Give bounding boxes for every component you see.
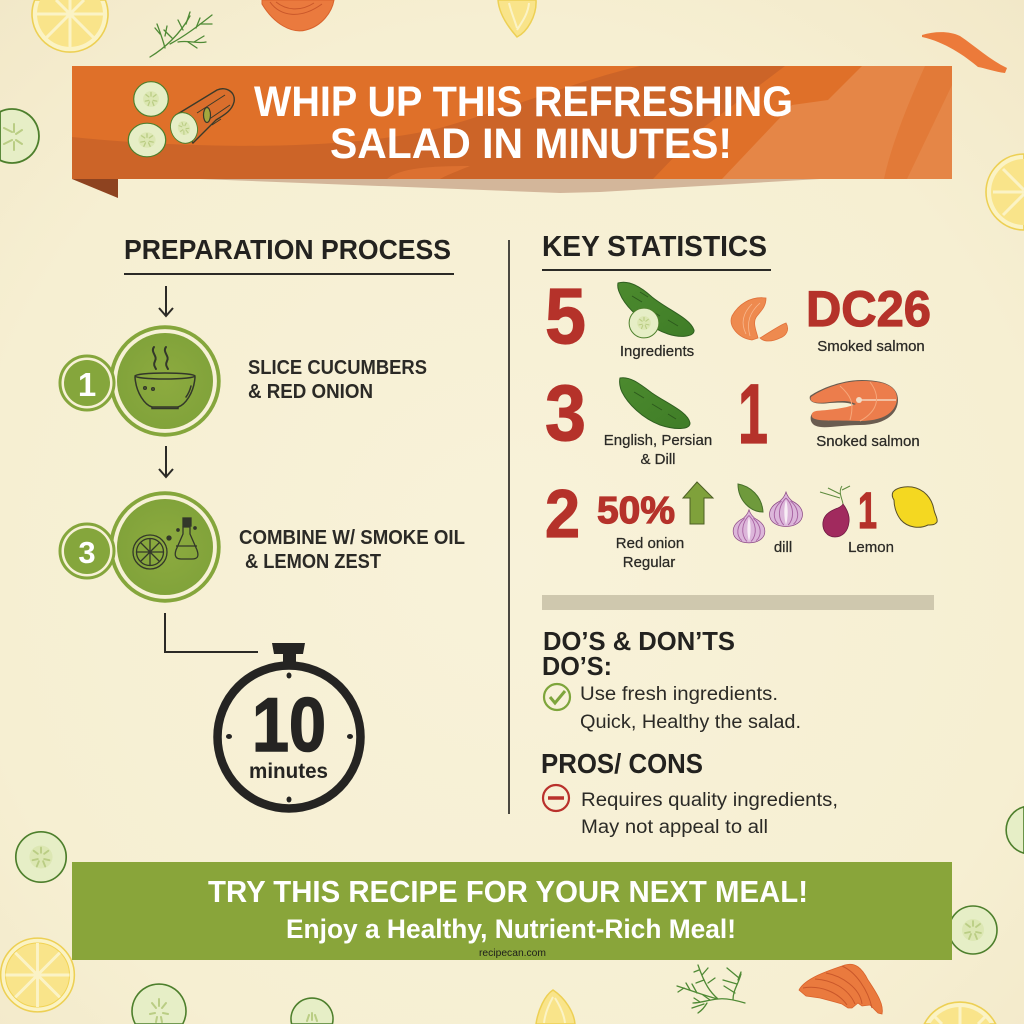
step 1 number badge: 1 xyxy=(78,366,96,403)
stat: DC26 smoked salmon xyxy=(731,281,931,355)
footer banner xyxy=(72,862,952,960)
icon: salmon piece top xyxy=(262,0,334,31)
heading: KEY STATISTICS xyxy=(542,231,767,263)
cucumber body xyxy=(176,89,234,143)
icon: lemon wedge top xyxy=(498,0,536,37)
stat: 2 red onion: Red onion xyxy=(616,535,684,552)
icon: cucumber slice lower right edge xyxy=(1006,807,1024,853)
footer headline: TRY THIS RECIPE FOR YOUR NEXT MEAL! xyxy=(208,874,808,909)
icon: salmon steak xyxy=(810,380,898,427)
title banner xyxy=(72,66,952,198)
icon: dill on red onion xyxy=(820,486,850,537)
panel: preparation process xyxy=(60,234,465,808)
icon: lemon slice right xyxy=(986,154,1024,230)
stat: 1 lemon: 1 xyxy=(858,482,877,539)
banner lighter area xyxy=(722,66,952,179)
icon: basil leaf xyxy=(738,484,763,512)
icon: salmon pieces xyxy=(731,298,788,341)
icon: dill sprig bottom xyxy=(677,965,745,1013)
do's text: Use fresh ingredients. xyxy=(580,684,778,705)
icon: cucumber xyxy=(620,378,690,429)
stat: 2 red onion: 2 xyxy=(545,476,580,552)
stat: DC26 smoked salmon: DC26 xyxy=(806,281,931,337)
cons text: Requires quality ingredients, xyxy=(581,790,838,811)
icon: lemon xyxy=(892,487,937,527)
icon: lemon slice bottom left xyxy=(1,938,74,1012)
step 3 text: COMBINE W/ SMOKE OIL xyxy=(239,527,465,549)
stat: 3 varieties: & Dill xyxy=(640,451,676,468)
banner shadow xyxy=(200,179,820,193)
source credit: recipecan.com xyxy=(479,948,546,959)
banner fold xyxy=(72,179,118,198)
stat: 3 varieties: English, Persian xyxy=(604,432,712,449)
step 3 xyxy=(60,493,219,601)
do's text: Quick, Healthy the salad. xyxy=(580,712,801,733)
panel: do's and don'ts xyxy=(541,626,838,838)
sub-heading: DO’S: xyxy=(542,651,612,681)
centre divider xyxy=(508,240,510,814)
icon: lemon slice top left xyxy=(32,0,108,52)
step 1 circle xyxy=(111,327,219,435)
step 3 number badge: 3 xyxy=(78,535,96,570)
stat: 1 snoked salmon: 1 xyxy=(738,367,768,461)
icon: cucumber slice lower left xyxy=(16,832,66,882)
arrow into step 1 xyxy=(159,286,173,316)
stat: 3 varieties xyxy=(545,368,712,468)
step 3 text: & LEMON ZEST xyxy=(245,551,381,573)
icon: onion left xyxy=(733,510,765,543)
title line 2: SALAD IN MINUTES! xyxy=(330,120,732,168)
cons text: May not appeal to all xyxy=(581,817,768,838)
panel: key statistics xyxy=(542,231,937,571)
banner darker wave xyxy=(72,66,785,179)
icon: lemon and oil bottle xyxy=(133,518,198,569)
icon: cucumber slice bottom xyxy=(132,984,186,1024)
banner diagonal band xyxy=(884,66,952,179)
stat: dill and onions xyxy=(733,484,802,556)
icon: onion right xyxy=(770,492,802,526)
stat: DC26 smoked salmon: Smoked salmon xyxy=(817,338,925,355)
heading: PROS/ CONS xyxy=(541,748,703,779)
icon: lemon slice bottom right xyxy=(924,1002,996,1024)
stat: 5 ingredients: 5 xyxy=(545,271,586,360)
step 3 circle xyxy=(111,493,219,601)
banner body xyxy=(72,66,952,179)
footer sub-headline: Enjoy a Healthy, Nutrient-Rich Meal! xyxy=(286,914,736,944)
section divider bar xyxy=(542,595,934,610)
icon: cucumber slice left xyxy=(0,109,39,163)
stat: 1 snoked salmon: Snoked salmon xyxy=(816,433,920,450)
banner small light patch xyxy=(387,166,470,179)
heading rule xyxy=(542,269,771,271)
stat: 1 lemon xyxy=(820,482,937,556)
connector to timer xyxy=(165,613,258,652)
heading rule xyxy=(124,273,454,275)
icon: lemon wedge bottom xyxy=(536,990,575,1024)
timer value: 10 xyxy=(252,683,326,768)
step 1 xyxy=(60,327,219,435)
icon: up arrow xyxy=(683,482,713,524)
timer unit: minutes xyxy=(249,760,328,783)
icon: cucumber slice by footer xyxy=(949,906,997,954)
footer background xyxy=(72,862,952,960)
title line 1: WHIP UP THIS REFRESHING xyxy=(254,78,793,126)
stat: 2 red onion: Regular xyxy=(623,554,675,571)
banner icon: cucumber xyxy=(128,82,234,157)
stat: 1 lemon: Lemon xyxy=(848,539,894,556)
stat: dill and onions: dill xyxy=(774,539,792,556)
stat: 5 ingredients: Ingredients xyxy=(620,343,694,360)
stat: 1 snoked salmon xyxy=(738,367,920,461)
stat: 2 red onion: 50% xyxy=(597,490,675,532)
step 1 text: SLICE CUCUMBERS xyxy=(248,357,427,379)
icon: salmon piece bottom xyxy=(799,964,882,1014)
heading: PREPARATION PROCESS xyxy=(124,234,451,265)
icon: check xyxy=(544,684,570,710)
icon: cucumber with slice xyxy=(618,282,694,338)
arrow into step 3 xyxy=(159,446,173,477)
stat: 3 varieties: 3 xyxy=(545,368,586,457)
step 3 number badge xyxy=(60,524,114,578)
icon: salmon strip top right xyxy=(922,32,1007,73)
heading: DO’S & DON’TS xyxy=(543,626,735,656)
stat: 2 red onion xyxy=(545,476,713,571)
icon: cucumber slice bottom centre xyxy=(291,998,333,1024)
step 1 number badge xyxy=(60,356,114,410)
icon: stopwatch, 10 minutes xyxy=(218,643,360,808)
icon: steaming bowl xyxy=(135,347,195,408)
step 1 text: & RED ONION xyxy=(248,381,373,403)
icon: dill sprig top xyxy=(150,12,212,57)
icon: minus xyxy=(543,785,569,811)
stat: 5 ingredients xyxy=(545,271,694,360)
